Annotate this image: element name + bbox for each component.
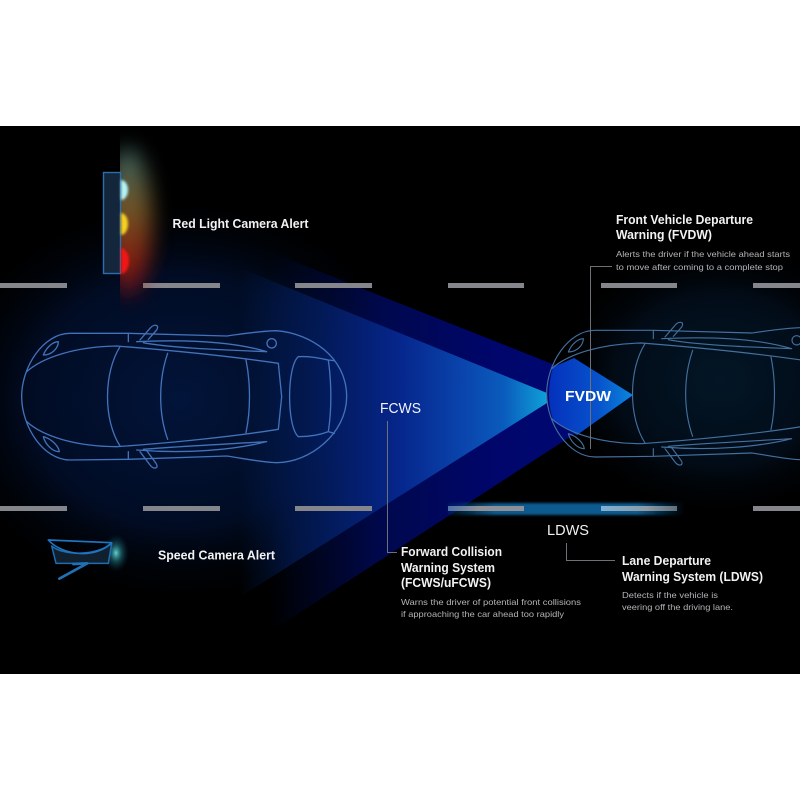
text block: forward collision warning system: Forward Collision (401, 545, 502, 559)
text block: lane departure warning system: Warning System (LDWS) (622, 570, 763, 584)
beam: forward collision warning wide cone (240, 252, 633, 632)
text block: front vehicle departure warning: to move after coming to a complete stop (616, 262, 783, 272)
badge: FVDW: FVDW (565, 388, 612, 405)
text block: forward collision warning system: Warns the driver of potential front collisions (401, 597, 581, 607)
beam: forward collision warning inner cone (240, 268, 547, 597)
text block: lane departure warning system (622, 554, 763, 612)
leader line: LDWS (566, 543, 615, 560)
car: rear vehicle outline (22, 325, 347, 468)
label: speed camera alert: Speed Camera Alert (158, 548, 276, 562)
road lane markings: upper (0, 283, 800, 288)
beam: front vehicle departure warning cone (549, 358, 633, 435)
text block: forward collision warning system: if approaching the car ahead too rapidly (401, 609, 565, 619)
text block: front vehicle departure warning: Alerts the driver if the vehicle ahead starts (616, 249, 790, 259)
badge: FCWS: FCWS (380, 400, 421, 417)
car: front vehicle outline (547, 322, 800, 465)
panel: night road background (0, 126, 800, 674)
text block: lane departure warning system: veering off the driving lane. (622, 602, 733, 612)
badge: LDWS: LDWS (547, 522, 589, 539)
leader line: FVDW (590, 266, 612, 449)
text block: forward collision warning system (401, 545, 581, 619)
icon: speed camera (48, 534, 129, 579)
label: red light camera alert: Red Light Camera Alert (172, 217, 309, 231)
text block: front vehicle departure warning (616, 213, 790, 272)
leader line: FCWS (388, 421, 397, 552)
text block: forward collision warning system: (FCWS/uFCWS) (401, 576, 491, 590)
road lane markings: lower (0, 506, 800, 511)
icon: traffic light (104, 148, 152, 296)
text block: lane departure warning system: Lane Departure (622, 554, 711, 568)
text block: forward collision warning system: Warning System (401, 561, 495, 575)
text block: lane departure warning system: Detects if the vehicle is (622, 590, 718, 600)
lane departure glow strip (448, 503, 685, 515)
text block: front vehicle departure warning: Warning (FVDW) (616, 228, 712, 242)
text block: front vehicle departure warning: Front Vehicle Departure (616, 213, 753, 227)
